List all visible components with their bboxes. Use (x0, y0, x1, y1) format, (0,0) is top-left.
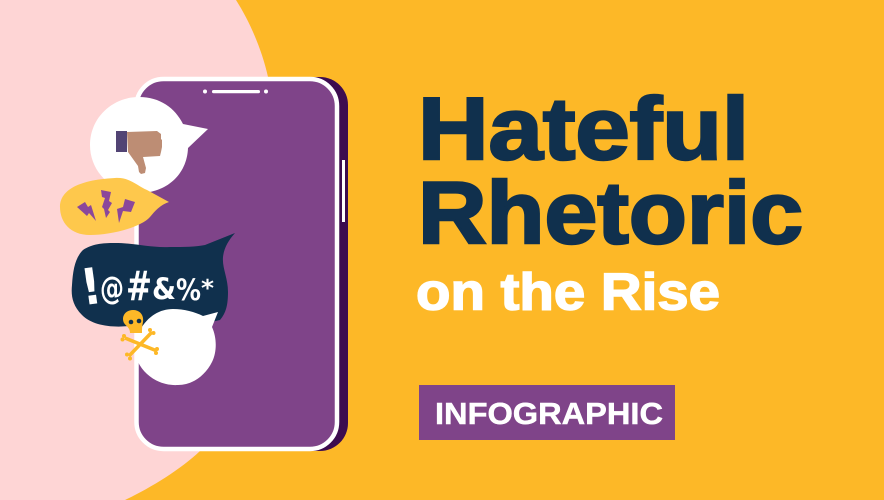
icon: crossbones (120, 328, 159, 360)
white speech bubble with skull (120, 309, 218, 385)
title: Hateful (418, 79, 749, 178)
symbols text (77, 257, 214, 317)
symbols text: # (126, 262, 152, 310)
yellow speech bubble with lightning bolts (60, 178, 169, 235)
symbols text: @ (100, 269, 124, 307)
title: Rhetoric (418, 163, 803, 262)
white speech bubble with thumbs down (90, 97, 208, 193)
symbols text: ! (77, 257, 105, 317)
icon: thumbs down (116, 131, 162, 174)
title (418, 79, 803, 262)
infographic label (419, 385, 675, 440)
symbols text: & (152, 272, 176, 306)
phone (136, 77, 348, 451)
symbols text: * (201, 276, 214, 302)
subtitle: on the Rise (416, 264, 720, 322)
dark speech bubble with symbols (72, 233, 235, 327)
icon: skull (123, 310, 143, 333)
symbols text: % (176, 273, 201, 307)
phone speaker (203, 90, 268, 94)
pink background shape (0, 0, 277, 500)
icon: lightning bolts (77, 190, 135, 223)
phone side button (342, 160, 345, 222)
infographic label: INFOGRAPHIC (435, 396, 663, 431)
